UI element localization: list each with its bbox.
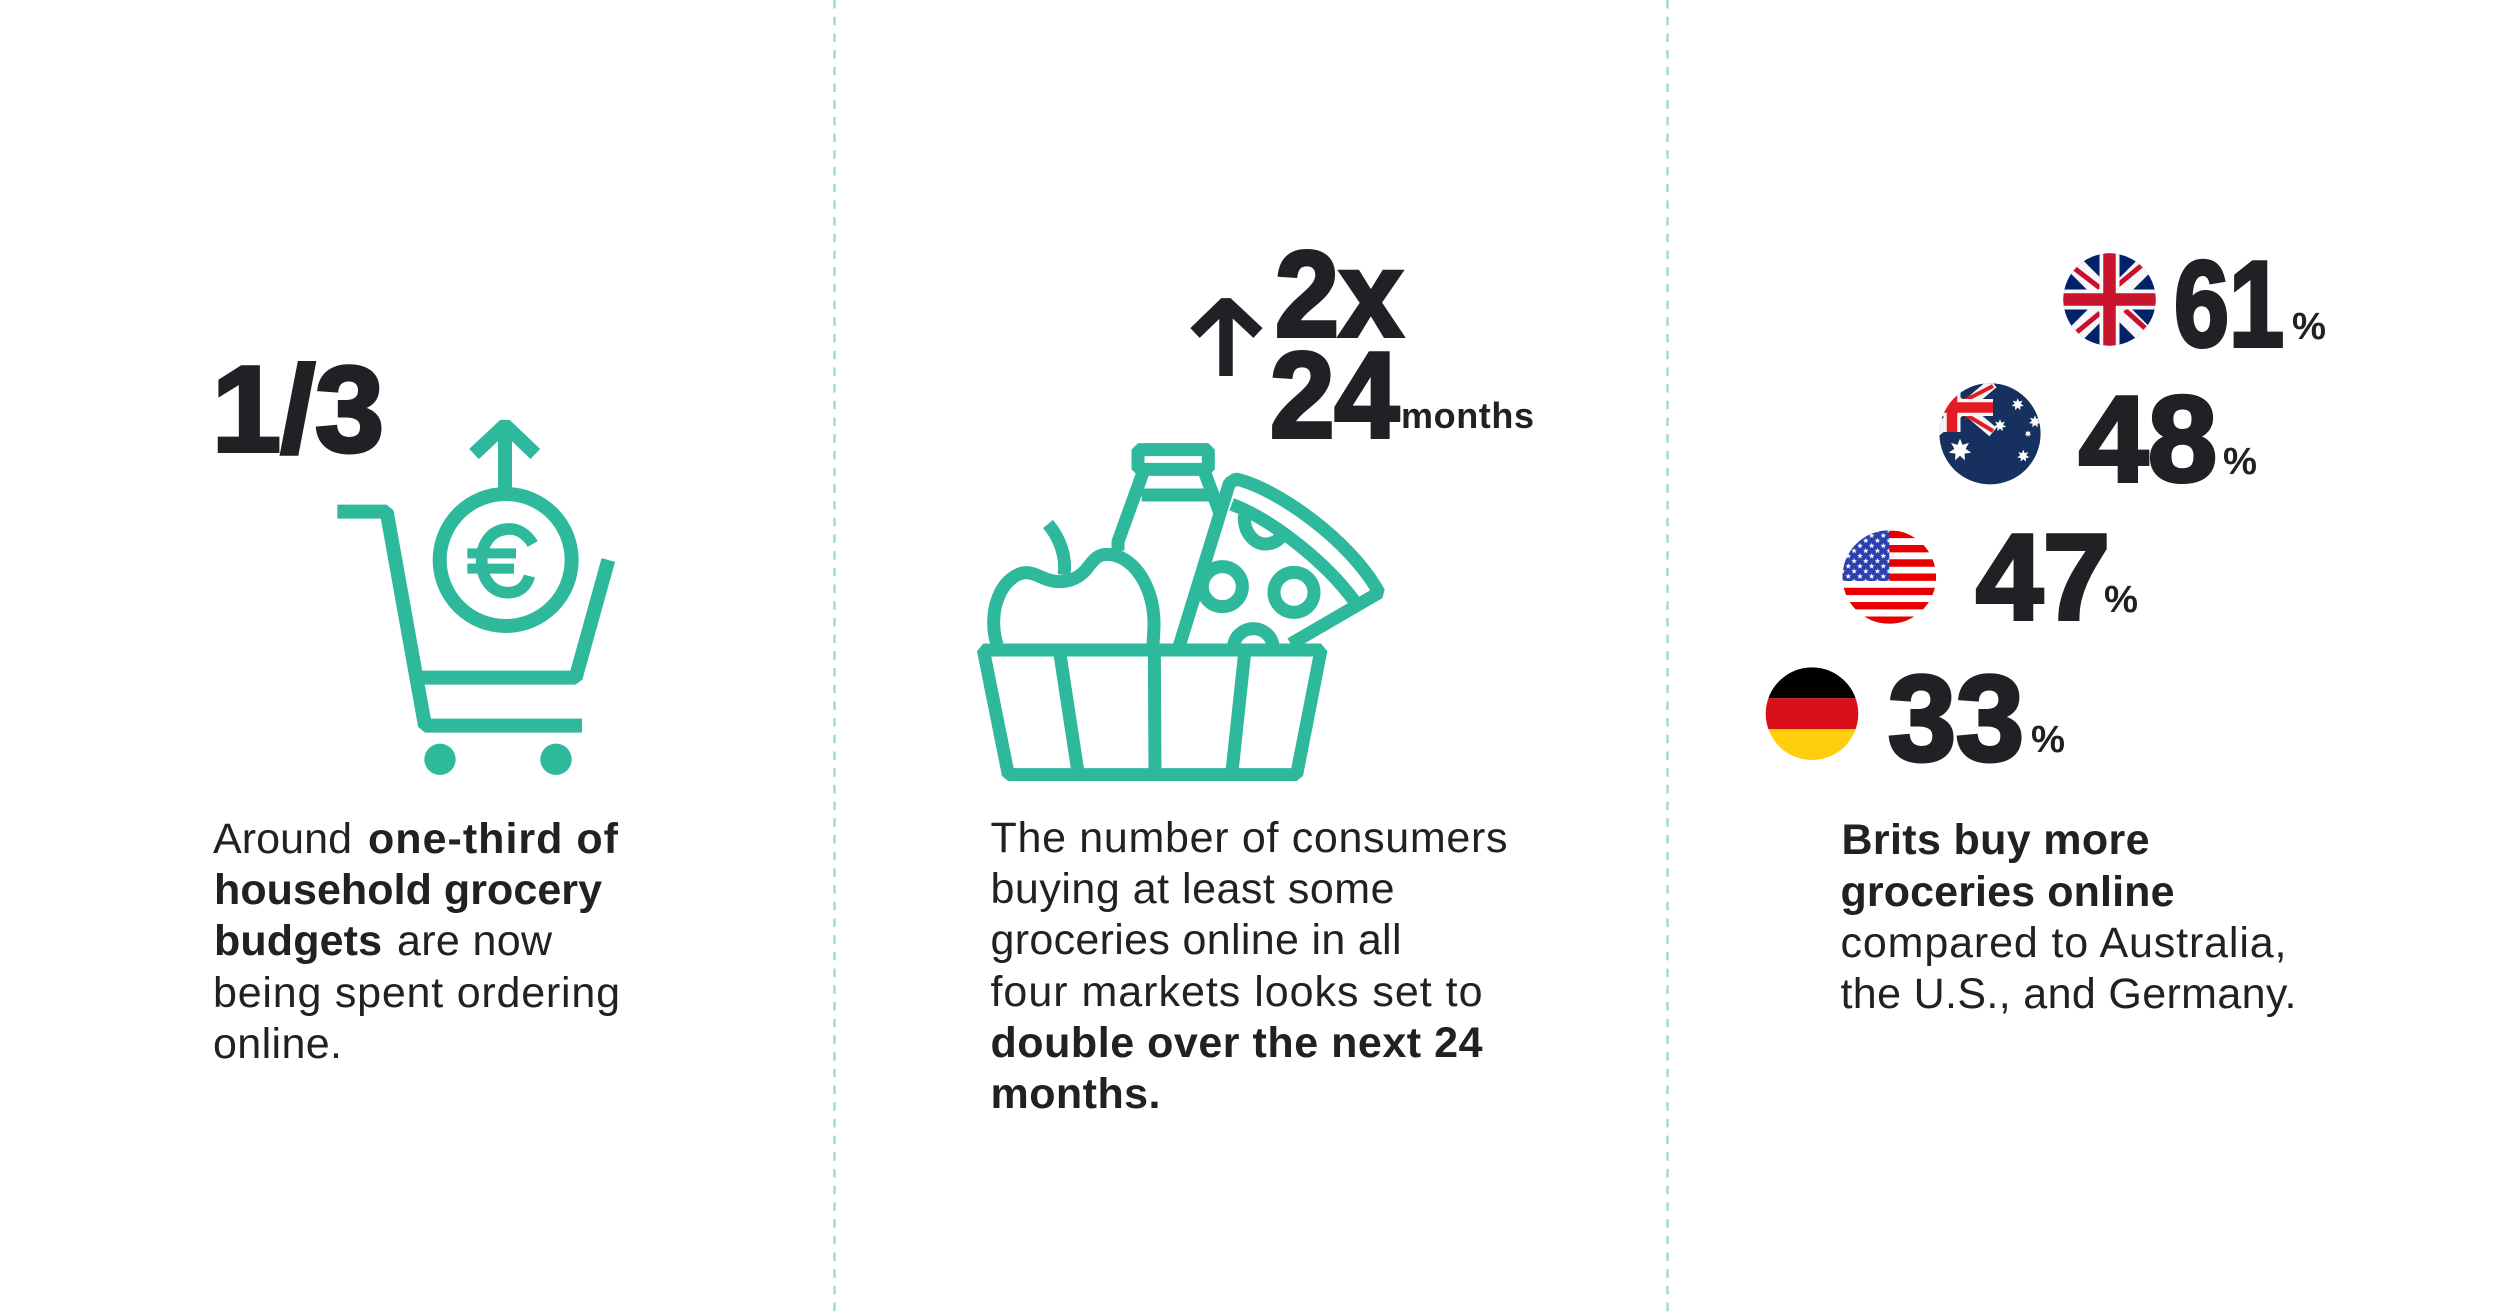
- text block: one-third description: online.: [213, 1020, 342, 1068]
- stat: UK 61%: 61: [2174, 236, 2284, 372]
- panel: double in 24 months: [983, 226, 1534, 1118]
- text block: one-third description: one-third of: [368, 815, 619, 863]
- stat: US 47%: 47: [1976, 509, 2110, 645]
- text block: doubling description: four markets looks set to: [990, 968, 1482, 1016]
- text block: doubling description: groceries online in all: [990, 916, 1402, 964]
- text block: doubling description: The number of consumers: [990, 814, 1508, 862]
- text block: Brits description: Brits buy more: [1842, 816, 2150, 864]
- text block: Brits description: the U.S., and Germany.: [1840, 970, 2296, 1018]
- icon: grocery basket with apple, bottle and pizza: [983, 450, 1379, 775]
- stat: Germany 33%: %: [2031, 719, 2065, 761]
- text block: Brits description: groceries online: [1840, 868, 2174, 916]
- text block: one-third description: are now: [397, 917, 553, 965]
- text block: doubling description: [990, 814, 1508, 1118]
- panel: country comparison: [1760, 236, 2326, 1018]
- stat: Australia 48%: %: [2223, 441, 2257, 483]
- flag: United States: [1842, 530, 1936, 624]
- statistic: 1/3: 1/3: [212, 341, 384, 477]
- text block: doubling description: months.: [990, 1070, 1160, 1118]
- text block: doubling description: double over the next 24: [990, 1019, 1483, 1067]
- stat: US 47%: %: [2104, 579, 2138, 621]
- text block: one-third description: [213, 815, 620, 1068]
- text block: one-third description: being spent ordering: [213, 969, 620, 1017]
- stat: UK 61%: %: [2292, 306, 2326, 348]
- statistic: 24 months: months: [1401, 395, 1534, 436]
- icon: dark up arrow: [1195, 303, 1258, 376]
- statistic: 24 months: [1270, 327, 1534, 463]
- text block: Brits description: compared to Australia,: [1840, 919, 2286, 967]
- statistic: 2x: 2x: [1275, 226, 1403, 362]
- flag: United Kingdom: [2063, 253, 2156, 346]
- flag: Germany: [1766, 667, 1858, 760]
- text block: one-third description: household grocery: [214, 866, 602, 914]
- stat: Australia 48%: 48: [2079, 371, 2217, 507]
- text block: one-third description: Around: [213, 815, 352, 863]
- stat: Germany 33%: 33: [1888, 650, 2024, 786]
- panel: one-third of budgets: [212, 341, 620, 1068]
- text block: doubling description: buying at least some: [990, 865, 1394, 913]
- text block: Brits description: [1840, 816, 2296, 1018]
- icon: shopping cart with euro coin and up arrow: [337, 425, 608, 775]
- text block: one-third description: budgets: [214, 917, 382, 965]
- flag: Australia: [1939, 383, 2041, 484]
- statistic: 24 months: 24: [1270, 327, 1399, 463]
